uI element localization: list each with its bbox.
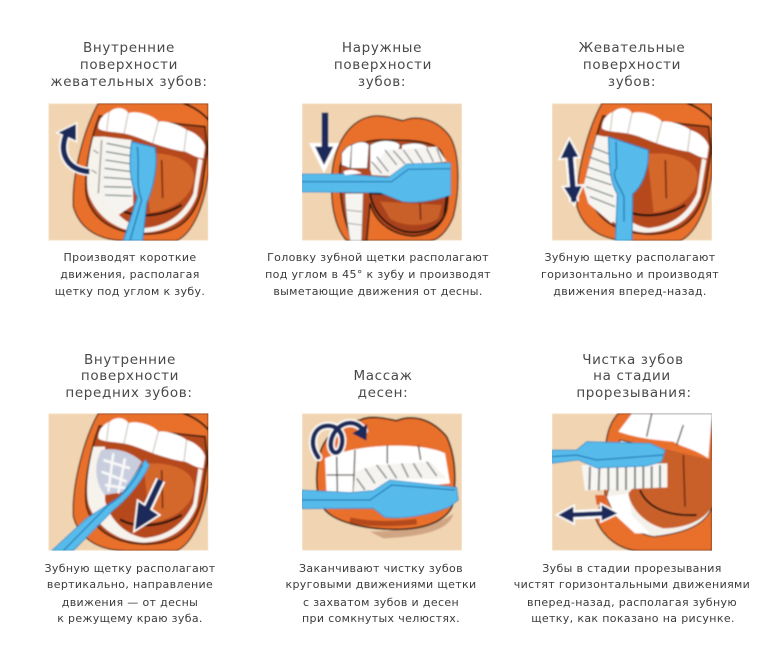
heading: Массаж — [353, 368, 413, 384]
caption: вертикально, направление — [47, 578, 213, 591]
heading: на стадии — [593, 368, 671, 384]
heading — [65, 352, 193, 401]
caption: при сомкнутых челюстях. — [302, 612, 460, 625]
illustration: gum massage — [302, 413, 462, 551]
caption: движения — от десны — [62, 596, 198, 609]
heading — [50, 40, 208, 90]
heading: поверхности — [80, 57, 178, 73]
caption — [541, 251, 719, 298]
caption: под углом в 45° к зубу и производят — [265, 268, 491, 281]
panel: outer surfaces — [265, 40, 491, 298]
heading: зубов: — [358, 74, 406, 90]
caption — [514, 562, 750, 625]
heading — [334, 40, 432, 90]
caption: выметающие движения от десны. — [273, 285, 483, 298]
panel: gum massage — [285, 368, 477, 625]
heading: прорезывания: — [576, 385, 692, 401]
caption: движения, располагая — [60, 268, 200, 281]
illustration: brushing inner front teeth — [48, 413, 208, 551]
panel: teething stage — [514, 352, 750, 625]
heading — [576, 352, 692, 401]
caption: движения вперед-назад. — [553, 285, 707, 298]
caption: Производят короткие — [63, 251, 197, 264]
heading: поверхности — [81, 368, 179, 384]
heading: поверхности — [334, 57, 432, 73]
caption: с захватом зубов и десен — [303, 596, 459, 609]
heading: жевательных зубов: — [50, 74, 208, 90]
illustration: brushing inner chewing surfaces — [48, 103, 208, 241]
caption: круговыми движениями щетки — [285, 578, 477, 591]
illustration: brushing chewing surfaces — [552, 103, 712, 241]
caption: Зубную щетку располагают — [544, 251, 716, 264]
caption: щетку под углом к зубу. — [55, 285, 205, 298]
heading: Чистка зубов — [582, 352, 684, 368]
heading: десен: — [358, 385, 408, 401]
heading — [353, 368, 413, 401]
caption: щетку, как показано на рисунке. — [531, 612, 735, 625]
panel: chewing surfaces — [541, 40, 719, 298]
panel: inner surfaces of front teeth — [44, 352, 216, 625]
heading: Внутренние — [83, 40, 175, 56]
heading — [579, 40, 685, 90]
heading: поверхности — [583, 57, 681, 73]
heading: передних зубов: — [65, 385, 193, 401]
caption — [44, 562, 216, 625]
heading: Внутренние — [84, 352, 176, 368]
caption: Заканчивают чистку зубов — [299, 562, 463, 575]
illustration: brushing outer surfaces — [302, 103, 462, 241]
panel: inner chewing surfaces — [48, 40, 208, 298]
caption: Головку зубной щетки располагают — [267, 251, 489, 264]
illustration: brushing teething teeth — [552, 413, 712, 551]
caption — [55, 251, 205, 298]
heading: Наружные — [342, 40, 422, 56]
caption: к режущему краю зуба. — [57, 612, 203, 625]
heading: Жевательные — [579, 40, 685, 56]
caption — [265, 251, 491, 298]
heading: зубов: — [608, 74, 656, 90]
caption: вперед-назад, располагая зубную — [527, 596, 737, 609]
caption: Зубную щетку располагают — [44, 562, 216, 575]
caption: горизонтально и производят — [541, 268, 719, 281]
caption: Зубы в стадии прорезывания — [542, 562, 722, 575]
caption: чистят горизонтальными движениями — [514, 578, 750, 591]
caption — [285, 562, 477, 625]
